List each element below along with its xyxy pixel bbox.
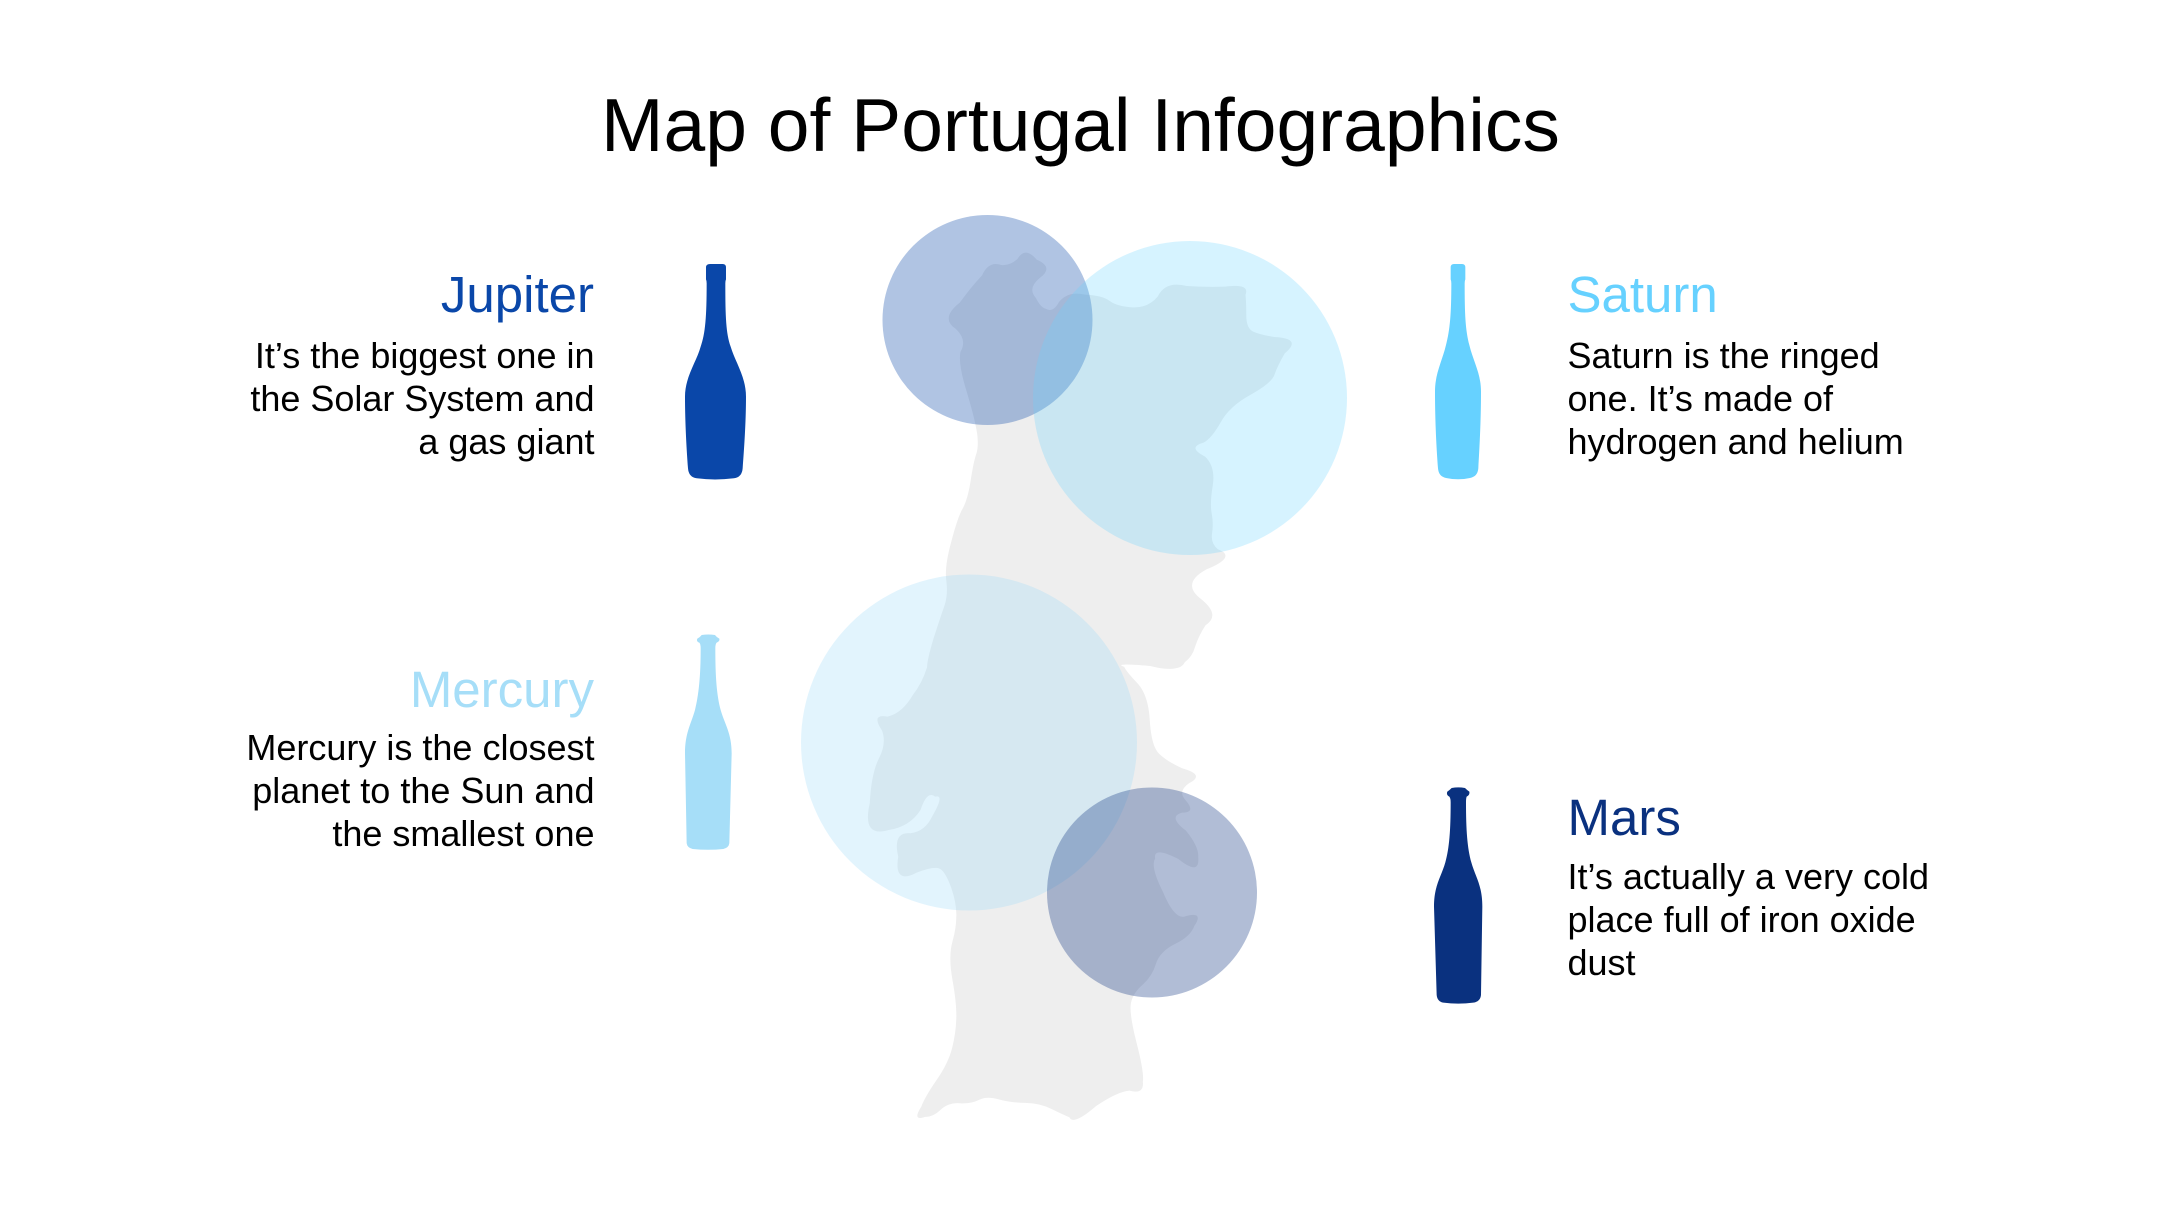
body: Mercury: planet to the Sun and: [252, 770, 594, 811]
heading: Mars: Mars: [1568, 789, 1681, 846]
text block: Jupiter: [250, 266, 594, 462]
body: Mars: place full of iron oxide: [1568, 899, 1916, 940]
icon: Saturn bottle: [1435, 264, 1481, 479]
body: Saturn: one. It’s made of: [1568, 378, 1834, 419]
title: Map of Portugal Infographics: [601, 83, 1560, 167]
heading: Mercury: Mercury: [410, 661, 594, 718]
body: Jupiter: [250, 335, 594, 462]
icon: Jupiter bottle: [685, 264, 746, 479]
body: Jupiter: the Solar System and: [250, 378, 594, 419]
body: Jupiter: a gas giant: [418, 421, 594, 462]
circle: Jupiter region: [882, 215, 1092, 425]
circle: Saturn region: [1033, 241, 1347, 555]
text block: Mercury: [246, 661, 594, 854]
body: Saturn: hydrogen and helium: [1568, 421, 1904, 462]
body: Mars: It’s actually a very cold: [1568, 856, 1929, 897]
body: Mars: dust: [1568, 942, 1636, 983]
body: Jupiter: It’s the biggest one in: [255, 335, 594, 376]
icon: Mars bottle: [1434, 787, 1482, 1004]
body: Mars: [1568, 856, 1929, 983]
text block: Mars: [1568, 789, 1929, 983]
circle: Mercury region: [801, 574, 1137, 910]
icon: Mercury bottle: [685, 634, 732, 850]
body: Mercury: [246, 727, 594, 854]
text block: Saturn: [1568, 266, 1904, 462]
body: Mercury: Mercury is the closest: [246, 727, 594, 768]
body: Mercury: the smallest one: [332, 813, 594, 854]
map of Portugal: [868, 253, 1292, 1120]
heading: Jupiter: Jupiter: [441, 266, 594, 323]
body: Saturn: Saturn is the ringed: [1568, 335, 1880, 376]
circle: Mars region: [1047, 788, 1257, 998]
body: Saturn: [1568, 335, 1904, 462]
heading: Saturn: Saturn: [1568, 266, 1718, 323]
